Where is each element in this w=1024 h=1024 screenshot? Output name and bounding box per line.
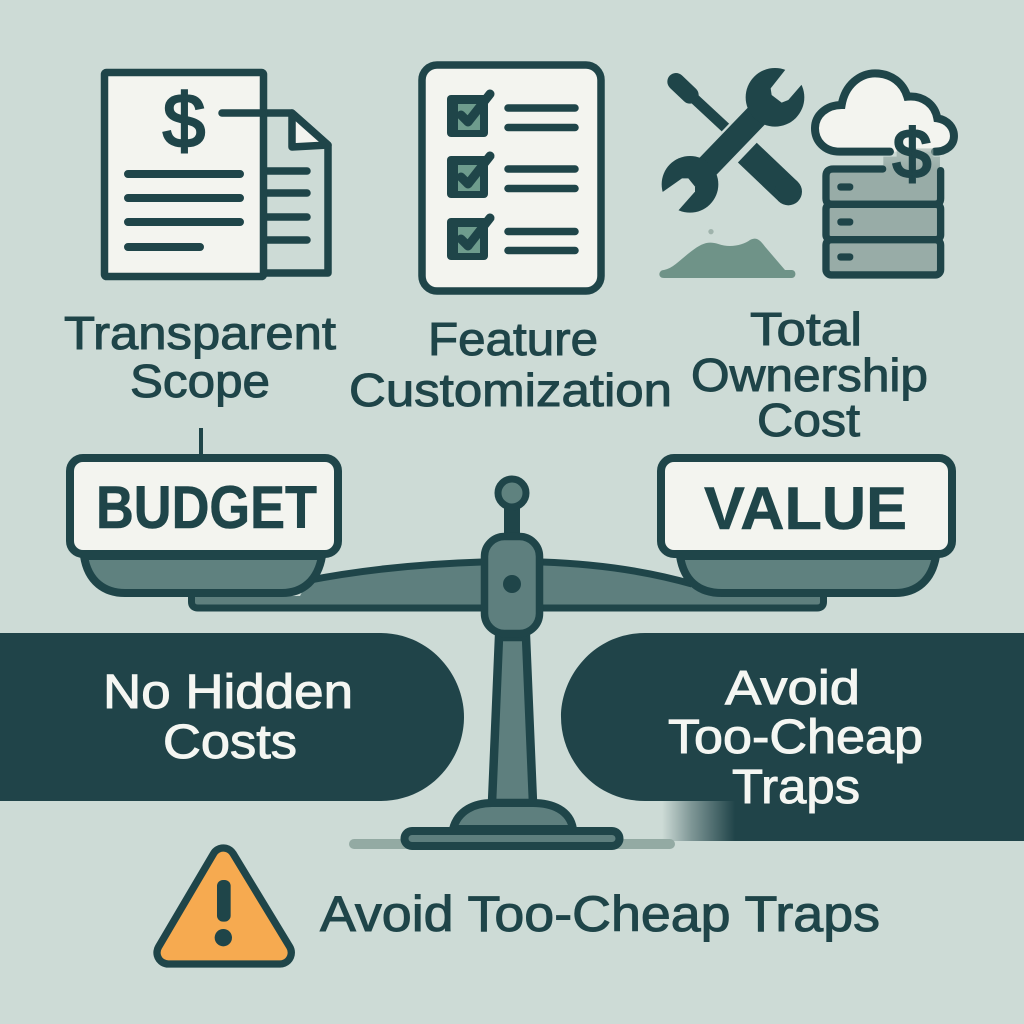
label: Feature Customization: Feature xyxy=(428,313,598,365)
label: Total Ownership Cost: Ownership xyxy=(691,349,928,401)
scale shadow xyxy=(349,839,675,849)
icon: cloud cost and server stack: $ xyxy=(893,116,931,192)
banner: Avoid Too-Cheap Traps: Avoid xyxy=(725,662,860,715)
banner: No Hidden Costs: Costs xyxy=(163,716,297,769)
icon: cloud cost and server stack xyxy=(815,73,954,275)
label: Transparent Scope: Scope xyxy=(130,355,270,407)
top knob and stem xyxy=(498,479,526,537)
label: Feature Customization: Customization xyxy=(349,364,672,416)
label: Total Ownership Cost xyxy=(691,303,928,446)
value box xyxy=(661,458,952,554)
icon: warning triangle xyxy=(168,859,280,953)
label: Total Ownership Cost: Total xyxy=(750,303,862,355)
connector tick above budget xyxy=(199,428,203,456)
value box: VALUE xyxy=(704,475,907,542)
icon: small hill xyxy=(659,229,795,278)
banner: No Hidden Costs: No Hidden xyxy=(103,666,353,719)
label: Total Ownership Cost: Cost xyxy=(757,394,860,446)
icon: dollar document xyxy=(104,72,328,276)
banner: Avoid Too-Cheap Traps: Too-Cheap xyxy=(668,711,923,764)
banner: Avoid Too-Cheap Traps xyxy=(561,633,1024,841)
label: Feature Customization xyxy=(349,313,672,416)
banner: Avoid Too-Cheap Traps: Traps xyxy=(732,761,860,814)
scale beam xyxy=(191,562,824,608)
icon: dollar document: $ xyxy=(163,79,205,164)
banner: No Hidden Costs xyxy=(0,633,464,801)
right pan xyxy=(680,556,936,593)
icon: crossed wrench and screwdriver xyxy=(658,57,820,220)
warning text: Avoid Too-Cheap Traps xyxy=(320,886,880,942)
icon: feature checklist xyxy=(422,65,601,291)
balance scale xyxy=(70,428,952,849)
label: Transparent Scope: Transparent xyxy=(64,307,336,359)
left pan xyxy=(84,556,322,593)
budget box xyxy=(70,458,338,554)
pivot hub xyxy=(484,536,540,634)
scale column and base xyxy=(404,637,620,846)
label: Transparent Scope xyxy=(64,307,336,407)
budget box: BUDGET xyxy=(96,474,317,541)
